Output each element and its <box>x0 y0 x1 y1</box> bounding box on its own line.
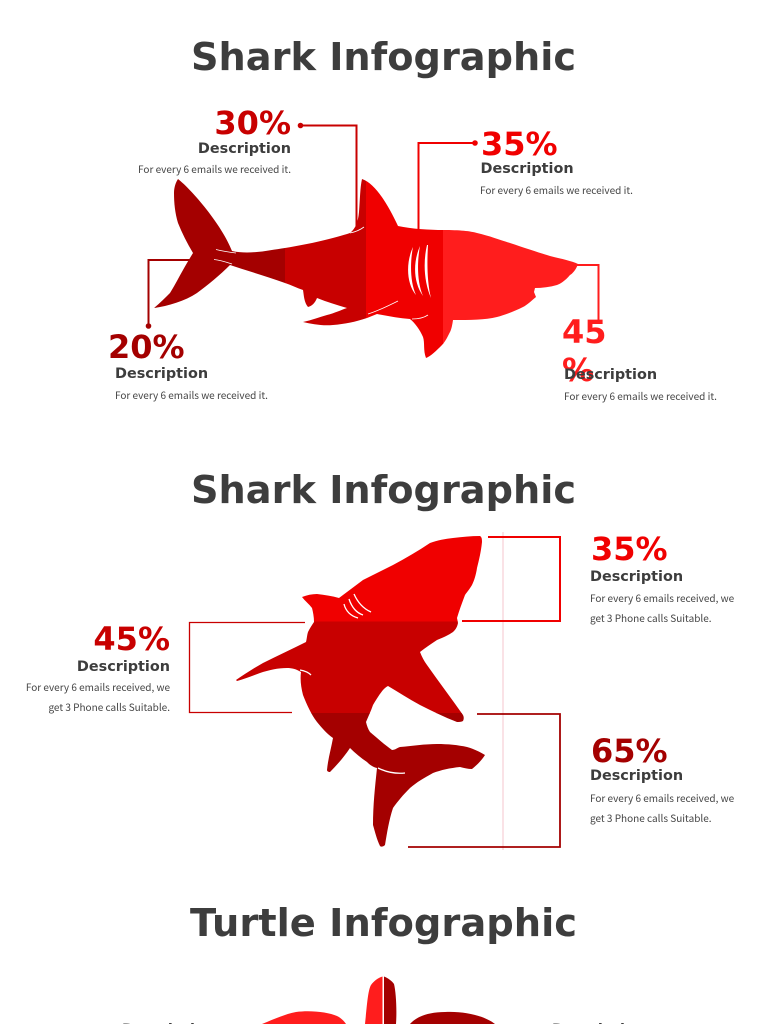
callout: 65%: get 3 Phone calls Suitable. <box>590 810 712 825</box>
callout: 35% <box>480 125 633 197</box>
turtle diagram, cropped at page bottom <box>262 976 495 1024</box>
callout: 45%: For every 6 emails received, we <box>26 679 170 694</box>
callout: 35%: For every 6 emails we received it. <box>480 182 633 197</box>
turtle right half <box>384 976 495 1024</box>
callout: 65%: For every 6 emails received, we <box>590 790 735 805</box>
callout: 20%: For every 6 emails we received it. <box>115 387 268 402</box>
callout: 35%: Description <box>590 569 683 585</box>
connector: 20% <box>146 260 192 329</box>
callout: 45%: Description <box>564 367 657 383</box>
callout: 30%: For every 6 emails we received it. <box>138 161 291 176</box>
title: shark infographic 2: Shark Infographic <box>191 468 576 512</box>
callout: 65% <box>590 732 735 825</box>
callout: 30% <box>138 104 291 176</box>
callout: 35%: For every 6 emails received, we <box>590 590 735 605</box>
bracket: 65% <box>408 714 560 847</box>
callout: 45%: % <box>562 351 594 389</box>
connector: 45% <box>577 265 598 322</box>
callout: 45% <box>26 620 170 714</box>
callout: 45%: 45% <box>93 620 170 658</box>
callout: 35% <box>590 530 735 625</box>
callout: 20%: 20% <box>108 328 185 366</box>
callout: 35%: Description <box>480 161 574 177</box>
callout: 65%: Description <box>590 768 683 784</box>
turtle left half <box>262 976 382 1024</box>
callout: 45% <box>562 313 717 403</box>
callout: 20%: Description <box>115 366 208 382</box>
title: shark infographic 1: Shark Infographic <box>191 35 576 79</box>
shark diagram 2 <box>190 530 560 853</box>
shark silhouette side view <box>154 179 578 358</box>
callout: 45%: get 3 Phone calls Suitable. <box>48 699 170 714</box>
callout: 45%: 45 <box>562 313 607 351</box>
callout: 45%: For every 6 emails we received it. <box>564 388 717 403</box>
bracket: 45% <box>190 622 305 712</box>
callout: 30%: 30% <box>214 104 291 142</box>
shark silhouette top view <box>230 530 490 853</box>
connector: 35% <box>418 140 478 232</box>
title: turtle infographic: Turtle Infographic <box>190 901 577 945</box>
callout: 20% <box>108 328 268 402</box>
shark diagram 1 <box>140 123 598 370</box>
callout: 35%: get 3 Phone calls Suitable. <box>590 610 712 625</box>
callout: 35%: 35% <box>481 125 558 163</box>
callout: 35%: 35% <box>591 530 668 568</box>
bracket: 35% <box>462 537 560 621</box>
guide line <box>502 532 504 850</box>
callout: 65%: 65% <box>591 732 668 770</box>
connector: 30% <box>298 123 356 232</box>
callout: 45%: Description <box>77 659 170 675</box>
callout: 30%: Description <box>198 141 291 157</box>
